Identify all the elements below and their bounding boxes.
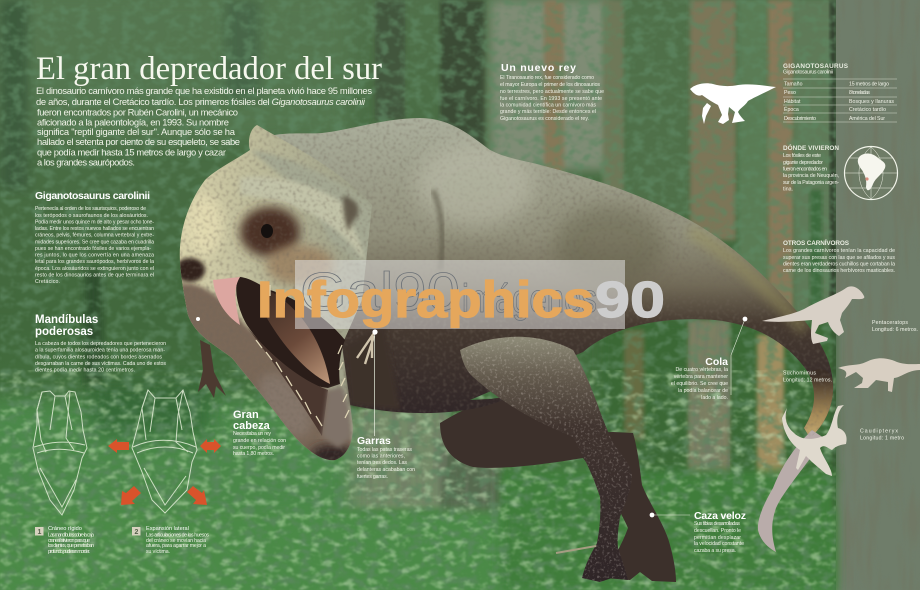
callout dot (196, 317, 200, 321)
label: Cola: el equilibrio. Se cree que (671, 381, 728, 387)
table values: Bosques y llanuras (849, 99, 894, 105)
panel: Un nuevo rey (500, 62, 604, 122)
near leg scale texture (455, 330, 635, 585)
heading: Giganotosaurus carolinii (35, 190, 150, 202)
label: Caza veloz: descuellan. Pronto le (694, 528, 741, 534)
panel: species data table: Giganotosaurus carolinii (783, 70, 833, 76)
panel: Dónde vivieron: gigante depredador (783, 160, 823, 166)
table values: Cretácico tardío (849, 107, 886, 113)
body text: res juntos, lo que los convertía en una amenaza (35, 252, 154, 258)
panel: Otros carnívoros: dientes eran verdaderos cuchillos que cortaban la (783, 262, 895, 268)
label: Gran cabeza: hasta 1,80 metros. (233, 451, 274, 457)
label: Caza veloz: Sus tibias desarrolladas (694, 521, 740, 527)
tail tip (758, 430, 824, 552)
callout dot (743, 317, 747, 321)
label: Caza veloz: Caza veloz (694, 510, 746, 522)
watermark panel (295, 260, 625, 329)
label: Garras: Todas las patas traseras (357, 447, 412, 453)
caption text 2: afuera, para agarrar mejor a (146, 543, 206, 549)
label: Cola: vértebra para mantener (674, 374, 728, 380)
label: Gran cabeza: Gran (233, 409, 259, 421)
label: Gran cabeza: grande en relación con (233, 438, 286, 444)
label: Caza veloz: permitían desplazar (694, 535, 741, 541)
chest shadow near jaw (345, 325, 400, 410)
silhouette: carnivore 1 (762, 286, 864, 344)
label: Caza veloz: la velocidad constante (694, 541, 744, 547)
number badge 2: 2 (134, 529, 138, 536)
label: Gran cabeza: Necesitaba un rey (233, 431, 271, 437)
far leg (440, 397, 676, 582)
arrow: lower left (121, 486, 141, 505)
panel: Dónde vivieron: la provincia de Neuquén, (783, 173, 839, 179)
icon: globe with South America (844, 146, 898, 200)
panel: Un nuevo rey: Un nuevo rey (501, 62, 576, 74)
body text: díbula, cuyos dientes rodeados con bordes aserrados (35, 354, 162, 360)
intro text block: fueron encontrados por Rubén Carolini, un mecánico (37, 106, 238, 118)
caption 1 (35, 526, 94, 555)
label: Cola: la podía balancear de (678, 388, 728, 394)
caption text 2: su víctima. (146, 549, 170, 555)
label: carnivore 2 name: Longitud: 12 metros. (783, 378, 832, 384)
near arm (357, 333, 374, 364)
label: carnivore 1 name: Longitud: 6 metros. (872, 327, 918, 333)
panel: species data table (783, 63, 897, 122)
body text: ladas. Entre los restos nuevos hallados se encuentran (35, 226, 154, 232)
callout dot (650, 513, 654, 517)
table values: 8 toneladas (849, 90, 870, 96)
label: carnivore 3 name (860, 428, 904, 442)
label: carnivore 3 name: Caudipteryx (860, 428, 898, 434)
label: Garras: como las anteriores, (357, 454, 405, 460)
intro text block: hallado el setenta por ciento de su esqueleto, se sabe (37, 136, 240, 147)
table values (784, 82, 894, 122)
body text: resto de los dinosaurios antes de que terminara el (35, 272, 154, 278)
caption 2 (132, 526, 209, 555)
label: Garras: tenían tres dedos. Las (357, 460, 407, 466)
table values: Descubrimiento (784, 116, 816, 122)
label: Garras: Garras (357, 435, 391, 447)
caption text 1: craneal sirvieron para que (48, 538, 90, 544)
intro text block: El dinosaurio carnívoro más grande que ha existido en el planeta vivió hace 95 millones (36, 85, 372, 96)
panel: Un nuevo rey: El Tiranosaurio rex, fue considerado como (500, 75, 594, 81)
panel: Otros carnívoros: carne de los dinosaurios herbívoros masticables. (783, 268, 895, 274)
panel: species data table: GIGANOTOSAURUS (783, 63, 849, 70)
caption text 1: Las mandíbulas sobre la caja (48, 532, 94, 538)
panel: Un nuevo rey: no terrestres, pero actualmente se sabe que (500, 89, 604, 95)
body and tail (250, 118, 833, 438)
watermark logo text: 90 (595, 271, 665, 328)
panel: Otros carnívoros: superar sus presas con las que se afilados y sus (783, 255, 895, 261)
caption text 1: los dientes, que penetraban (48, 543, 94, 549)
body text: pues se han encontrado fósiles de varios ejempla- (35, 246, 151, 252)
caption text 1: Cráneo rígido (48, 526, 82, 532)
caption text 2 (146, 526, 209, 555)
label: Cola: Cola (705, 356, 728, 368)
label: carnivore 2 name (783, 370, 832, 384)
intro text block: significa "reptil gigante del sur". Aunque sólo se ha (37, 126, 236, 137)
table values: Peso (784, 90, 796, 96)
panel: Un nuevo rey: fue el carnívoro. En 1993 se presentó ante (500, 96, 602, 102)
intro text block: a los grandes saurópodos. (37, 156, 135, 168)
leader line (652, 514, 690, 516)
body text: a la superfamilia alosauroidea tenía una poderosa man- (35, 348, 165, 354)
label: Cola (671, 317, 747, 401)
silhouette: feathered carnivore 3 (782, 405, 847, 476)
intro text block: que podía medir hasta 15 metros de largo y cazar (37, 146, 226, 158)
silhouette: carnivore 2 (838, 358, 920, 392)
body text: Podía medir unos quince m de alto y pesar ocho tone- (35, 220, 154, 226)
panel: Dónde vivieron (783, 143, 839, 192)
diagram: skull 1 rigid (33, 391, 87, 515)
table rows (783, 79, 897, 122)
near leg (460, 337, 632, 582)
label: Garras: fuertes garras. (357, 474, 388, 480)
body text: época. Los alosáuridos se extinguieron junto con el (35, 266, 154, 272)
caption text 1 (48, 526, 94, 555)
panel: Un nuevo rey: grande y más terrible: Desde entonces el (500, 109, 596, 115)
label: Gran cabeza: cabeza (233, 420, 271, 432)
panel: Otros carnívoros (783, 238, 895, 274)
callout dot (372, 329, 378, 335)
panel: Dónde vivieron: DÓNDE VIVIERON (783, 143, 839, 152)
diagram: skull 2 expanded (132, 390, 197, 513)
watermark outline text: Gal90 (300, 262, 460, 322)
mouth (213, 277, 351, 448)
number badge 1: 1 (38, 529, 42, 536)
table values: América del Sur (849, 116, 885, 122)
body text: cráneos, pelvis, fémures, columna vertebral y extre- (35, 232, 154, 238)
label: Cola: De cuatro vértebras, la (676, 367, 728, 373)
foot claw twig (556, 546, 596, 553)
body text: dientes podía medir hasta 20 centímetros. (35, 368, 135, 374)
label: Cola: lado a lado. (701, 395, 728, 401)
table values: Hábitat (784, 99, 801, 105)
arrow: skull left (108, 439, 129, 453)
body text: desgarraban la carne de sus víctimas. Cada uno de estos (35, 361, 166, 367)
body text (35, 206, 154, 285)
table values: Tamaño (784, 82, 803, 88)
far arm (198, 340, 226, 398)
icon: silhouette arm (702, 103, 711, 124)
leader line (731, 319, 745, 395)
label: carnivore 2 name: Suchomimus (783, 370, 816, 376)
watermark outline text: imágenes (462, 277, 597, 321)
table values: 15 metros de largo (849, 82, 889, 88)
heading (35, 314, 98, 338)
panel: Dónde vivieron: Los fósiles de este (783, 153, 821, 159)
watermark outline text (300, 262, 597, 322)
panel: Otros carnívoros: Los grandes carnívoros tenían la capacidad de (783, 248, 895, 254)
leader line (374, 332, 376, 436)
body text: La cabeza de todos los depredadores que pertenecieron (35, 341, 166, 347)
heading: poderosas (35, 326, 93, 338)
body text (35, 341, 166, 374)
dinosaur: Giganotosaurus (170, 115, 840, 585)
panel: Dónde vivieron: tina. (783, 186, 793, 192)
head shading (180, 126, 371, 460)
heading: Mandíbulas (35, 314, 98, 326)
panel: Dónde vivieron: sur de la Patagonia argen- (783, 180, 839, 186)
body text: Pertenecía al orden de los saurisquios, poderoso de (35, 206, 146, 212)
eye (261, 224, 273, 238)
label: carnivore 1 name: Pentaceratops (872, 320, 908, 326)
label: Gran cabeza (233, 409, 286, 457)
title: El gran depredador del sur (36, 51, 382, 87)
label: Caza veloz (650, 510, 746, 554)
panel: Dónde vivieron: fueron encontrados en (783, 166, 827, 172)
teeth (256, 285, 349, 426)
caption text 2: Expansión lateral (146, 526, 189, 532)
panel: Un nuevo rey: el mayor Europa el primer de los dinosaurios (500, 82, 600, 88)
label: Garras (357, 329, 415, 480)
intro text block (36, 85, 372, 168)
skin texture (250, 115, 840, 445)
panel: Giganotosaurus carolinii (35, 190, 154, 285)
icon: Giganotosaurus silhouette (690, 83, 776, 124)
caption text 2: del cráneo se movían hacia (146, 538, 206, 544)
panel: Un nuevo rey: la comunidad científica un carnívoro más (500, 102, 596, 108)
intro text block: aficionado a la paleontología, en 1993. Su nombre (37, 116, 229, 128)
watermark logo text: Infographics (257, 271, 594, 328)
caption text 2: Las articulaciones de los huesos (146, 532, 209, 538)
panel: Mandíbulas poderosas (35, 314, 200, 374)
body text: los terópodos o saurofaunos de los alosáuridos. (35, 213, 148, 219)
label: Gran cabeza: su cuerpo, podía medir (233, 445, 285, 451)
label: carnivore 3 name: Longitud: 1 metro (860, 436, 904, 442)
tail end shading (804, 369, 833, 438)
intro text block: de años, durante el Cretácico tardío. Los primeros fósiles del Giganotosaurus carolinii (36, 96, 366, 107)
body text: Cretácico. (35, 279, 60, 285)
body text: midades superiores. Se cree que cazaba en cuadrilla (35, 240, 154, 246)
panel: Un nuevo rey: Giganotosaurus es considerado el rey. (500, 116, 589, 122)
head (180, 125, 372, 460)
ridge shadow behind eye (343, 195, 358, 232)
label: carnivore 1 name (872, 320, 918, 333)
panel: Otros carnívoros: OTROS CARNÍVOROS (783, 238, 850, 247)
body text: letal para los grandes saurópodos, herbívoros de la (35, 259, 154, 265)
arrow: lower right (187, 486, 207, 505)
label: Caza veloz: cazaba a su presa. (694, 548, 736, 554)
label: Garras: delanteras acababan con (357, 467, 415, 473)
caption text 1: profundo, pudieran morder. (48, 549, 90, 555)
table values: Época (784, 106, 799, 113)
arrow: skull right (200, 439, 221, 453)
